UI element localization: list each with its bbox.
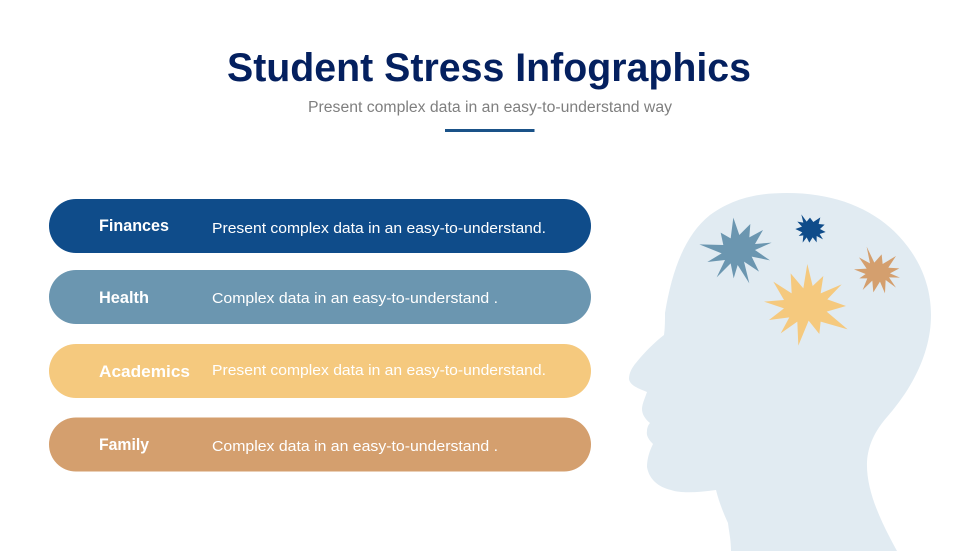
- academics description: Present complex data in an easy-to-understand.: [212, 362, 546, 379]
- health pill: [49, 270, 591, 324]
- icon: steel blue burst: [699, 218, 772, 283]
- health description: Complex data in an easy-to-understand .: [212, 290, 498, 307]
- academics label: Academics: [99, 362, 190, 381]
- academics pill: [49, 344, 591, 398]
- icon: yellow burst: [764, 264, 848, 346]
- family pill: [49, 418, 591, 472]
- panel: family: [49, 418, 591, 472]
- finances pill: [49, 199, 591, 253]
- title: Student Stress Infographics: [227, 46, 751, 90]
- panel: academics: [49, 344, 591, 398]
- icon: navy burst: [795, 214, 826, 243]
- finances description: Present complex data in an easy-to-understand.: [212, 220, 546, 237]
- family label: Family: [99, 435, 150, 454]
- health label: Health: [99, 288, 149, 307]
- family description: Complex data in an easy-to-understand .: [212, 438, 498, 455]
- title underline: [445, 129, 534, 132]
- head silhouette: [629, 193, 931, 551]
- panel: finances: [49, 199, 591, 253]
- head illustration: [629, 193, 931, 551]
- icon: tan burst: [854, 247, 900, 293]
- panel: health: [49, 270, 591, 324]
- finances label: Finances: [99, 216, 169, 235]
- subtitle: Present complex data in an easy-to-understand way: [308, 99, 672, 116]
